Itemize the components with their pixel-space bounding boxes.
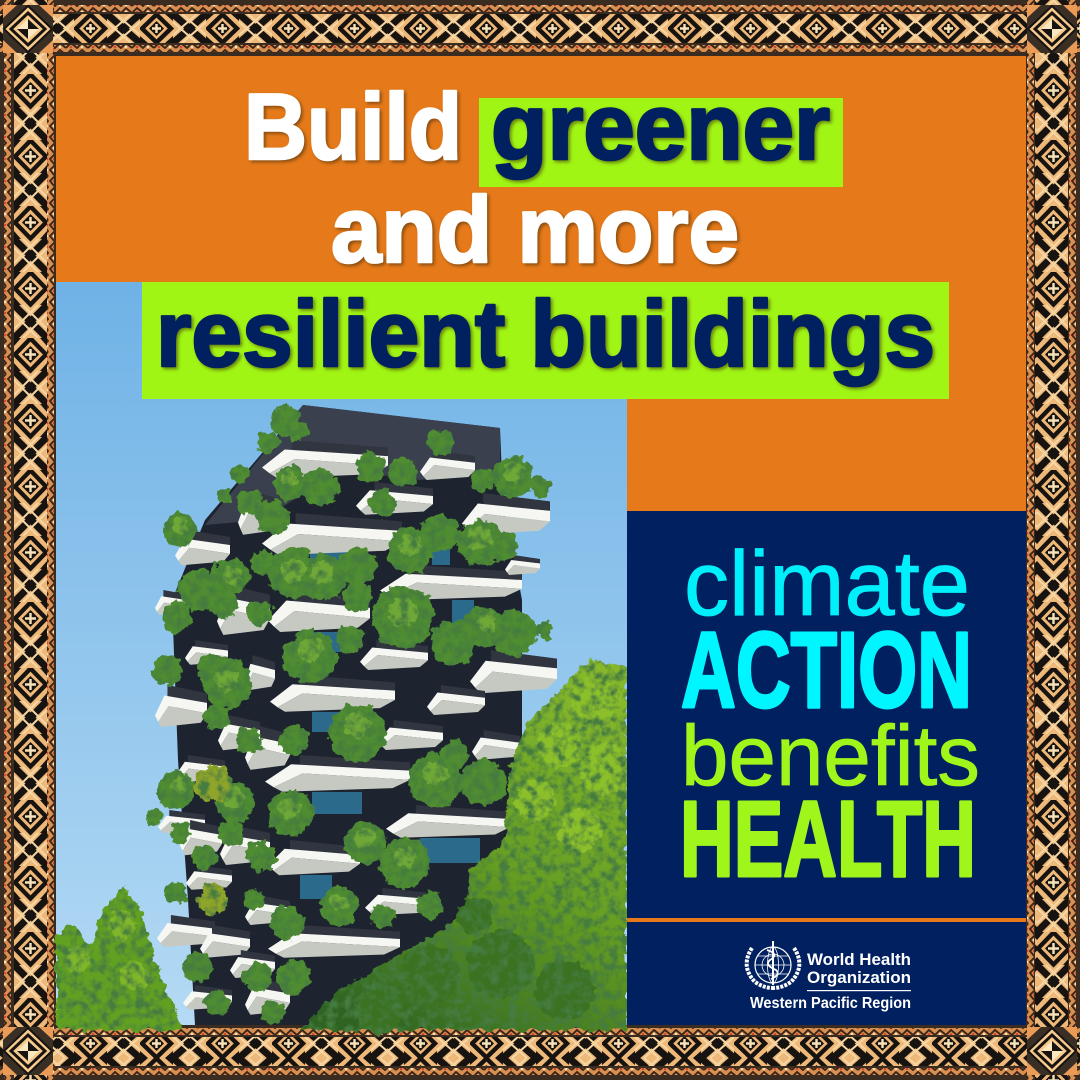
balconies — [155, 440, 557, 1015]
heading — [142, 74, 949, 399]
icon: WHO emblem — [747, 941, 799, 988]
heading line: Build: Build — [244, 74, 462, 179]
windows — [300, 540, 480, 899]
text: Western Pacific Region: Western Pacific Region — [750, 995, 911, 1012]
text: Organization: Organization — [807, 968, 911, 987]
heading line: and more: and more — [331, 177, 739, 282]
text: benefits: benefits — [681, 709, 980, 804]
text: World Health: World Health — [807, 950, 911, 969]
heading line: greener: greener — [491, 74, 830, 179]
tower upper cladding — [205, 405, 500, 525]
panel: climate action benefits health — [627, 511, 1026, 1025]
tower body — [172, 405, 522, 1025]
heading line: resilient buildings: resilient buildings — [156, 281, 935, 386]
highlight: resilient buildings — [142, 282, 949, 399]
tower foliage — [146, 407, 552, 1025]
photo: vertical-forest tower against sky — [56, 282, 631, 1034]
divider — [627, 918, 1026, 922]
highlight: greener — [479, 98, 843, 187]
text: climate: climate — [684, 533, 970, 635]
foreground trees — [56, 660, 631, 1034]
logo: World Health Organization Western Pacific Region — [747, 941, 911, 1012]
